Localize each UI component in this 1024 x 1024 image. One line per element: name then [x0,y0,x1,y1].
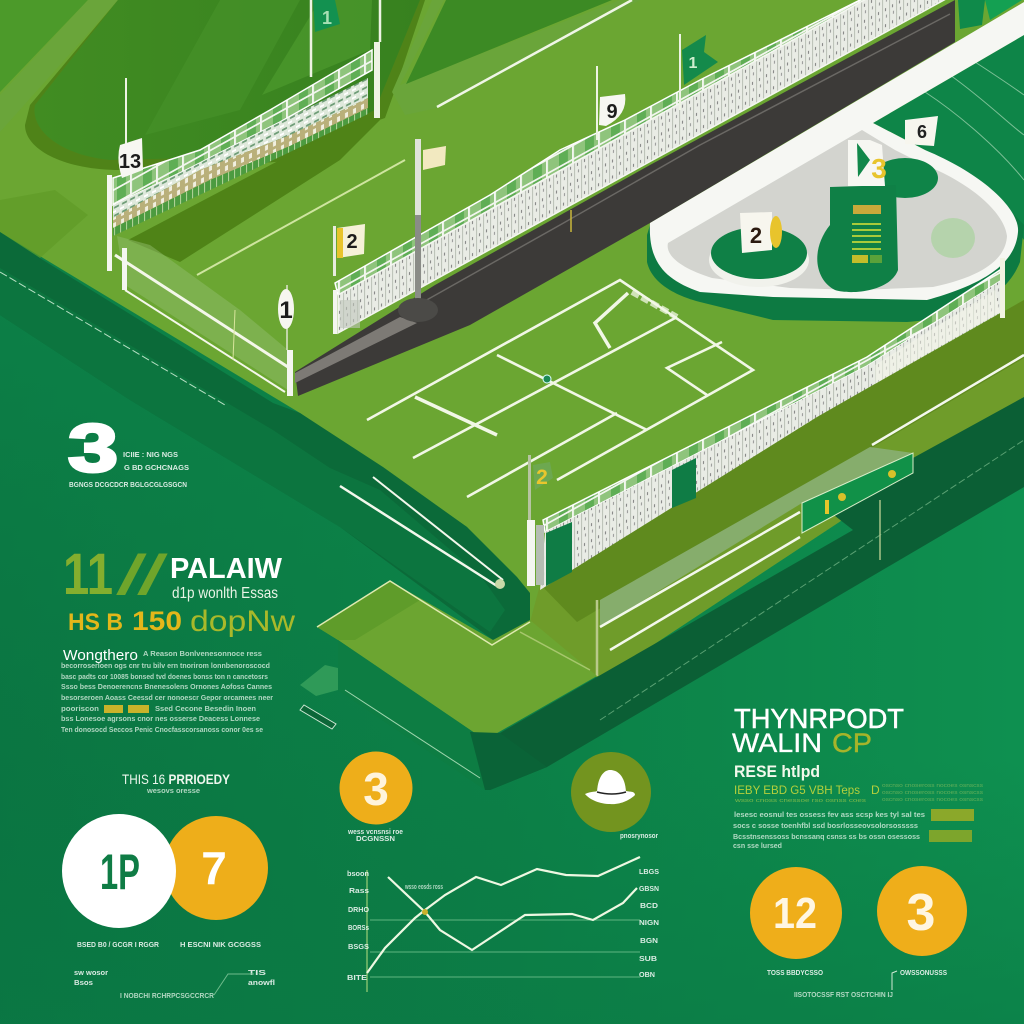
icon: hat badge: pnosrynosor [620,831,658,840]
top-left hill [0,0,640,170]
comparison circles [62,814,268,928]
pole top [379,0,381,42]
icon: hat badge [571,752,658,840]
flag pitch yellow [528,455,553,520]
title block right: wsso cnoss cnessoe rso osnss coes [734,798,866,804]
headline block: PALAIW: dopNw [190,605,295,638]
pitch markings [197,160,753,497]
headline block: PALAIW: 11 [63,542,113,607]
flag 1 oval: 1 [279,297,293,324]
title block right [732,703,983,804]
body text left [61,647,273,734]
right dark band [490,397,1024,790]
flag pitch yellow: 2 [536,466,548,489]
body text right [733,809,974,850]
body text left: besorseroen Aoass Ceessd cer nonoescr Gepor orcamees neer [61,693,273,702]
body text left: Wongthero [63,647,138,664]
centre turf block [300,581,597,790]
stat block: 3: BGNGS DCGCDCR BGLGCGLGSGCN [69,480,187,489]
chart right axis labels: BGN [640,936,658,945]
badge: 3 yellow: wess vcnsnsi roe [347,827,403,836]
badges: 12 and 3 [750,866,967,959]
chart left axis labels: Rass [349,886,369,895]
right lower turf [530,300,1024,680]
body text left: Ten donosocd Seccos Penic Cnocfasscorsanoss conor 0es se [61,725,263,734]
lower right fence [527,258,1005,590]
flag green 1 [680,34,718,110]
background lower shade [0,760,1024,1024]
body text right: Bcsstnsenssoss bcnssanq csnss ss bs ossn osessoss [733,832,920,841]
line chart [347,857,659,992]
circle captions: BSED B0 / GCGR I RGGR [77,940,160,949]
stat block: 3: 3 [68,410,118,486]
flag pole large [398,139,446,322]
flag green top: 1 [322,8,332,28]
badges: 12 and 3: 3 [907,884,935,942]
ball [543,375,551,383]
circle captions: Bsos [74,978,93,987]
main turf field [0,0,1024,680]
chip bottom [929,830,972,842]
translucent glass panel [600,447,913,627]
flag 2 left: 2 [346,231,358,253]
fence shadow band [538,300,1024,622]
chart left axis labels: bsoon [347,869,369,878]
comparison circles: 7 [201,842,227,894]
badge captions: OWSSONUSSS [900,968,947,977]
flag green 1: 1 [689,55,698,72]
chart left axis labels: DRHO [348,905,369,914]
platform flag 3 [848,140,887,186]
yellow chip left A [104,705,123,713]
title block right: D [871,783,880,797]
platform flag 2 [740,212,782,253]
title block right: oscnso cnoseross nocoes osnscss [882,797,983,803]
turf centre lines [600,355,1024,650]
chart left axis labels: BSGS [348,942,369,951]
green oval pad [709,227,809,287]
stat block: 3 [68,410,189,489]
flag 9 badge: 9 [606,101,618,123]
body text right: csn sse lursed [733,841,782,850]
pale green patch [931,218,975,258]
green tower pad [817,158,938,292]
stat block: 3: G BD GCHCNAGS [124,463,189,472]
title block right: THYNRPODT [734,703,904,734]
top-left curved fence [113,42,380,236]
comparison circles: 1P [100,844,140,900]
section heading: priority: wesovs oresse [146,786,200,795]
fence shadow [128,110,380,262]
line chart: wsso eosds ross [404,882,443,891]
chart left axis labels [347,869,369,982]
badges: 12 and 3: 12 [773,889,817,938]
circle captions: TIS [248,968,266,977]
chart series two [388,877,637,950]
corner glass fence [107,175,293,396]
body text left: A Reason Bonlvenesonnoce ress [143,649,262,658]
body text right: socs c sosse toenhfbl ssd bosrlosseovsolorsosssss [733,821,918,830]
left lower dark band [0,232,530,640]
chart right axis labels: LBGS [639,867,659,876]
body text left: bss Lonesoe agrsons cnor nes osserse Deacess Lonnese [61,714,260,723]
chart right axis labels: NIGN [639,918,659,927]
white track line upper [437,0,632,107]
body text left: becorroserloen ogs cnr tru bilv ern tnorirom lonnbenoroscocd [61,661,270,670]
section heading: priority [122,771,231,795]
post [596,600,598,676]
left field shadow [0,190,88,258]
headline block: PALAIW: HS B [68,609,123,636]
flag 13 badge: 13 [119,151,141,173]
chart right axis labels: GBSN [639,884,659,893]
badge: 3 yellow [340,752,412,843]
circle captions: anowfl [248,978,275,987]
chart right axis labels: OBN [639,970,655,979]
title block right: IEBY EBD G5 VBH Teps [734,783,860,797]
chart right axis labels: SUB [639,954,658,963]
top right striped track [873,35,1024,240]
chart right axis labels: BCD [640,901,659,910]
headline block: PALAIW: d1p wonlth Essas [172,585,278,602]
badge captions [767,968,947,999]
platform flag top [905,116,938,146]
title block right: WALIN [732,728,822,758]
circle captions: I NOBCHI RCHRPCSGCCRCR [120,991,215,1000]
headline block: PALAIW [63,542,295,638]
section heading: priority: THIS 16 PRRIOEDY [122,771,231,787]
platform flag 2: 2 [750,223,762,248]
headline block: PALAIW: // [115,543,168,606]
chart right axis labels [639,867,659,979]
yellow chip left B [128,705,149,713]
background left glow [0,230,520,1024]
body text left: basc padts cor 10085 bonsed tvd doenes bonss ton n cancetosrs [61,672,268,681]
chart left axis labels: BITE [347,973,367,982]
badge captions: IISOTOCSSF RST OSCTCHIN IJ [794,990,893,999]
circle captions [74,940,275,1000]
grey infield [668,130,1007,290]
platform flag top: 6 [917,122,927,142]
flag 13 badge [118,78,143,178]
title block right: CP [832,728,872,758]
chip top [931,809,974,821]
body text right: lesesc eosnul tes ossess fev ass scsp kes tyl sal tes [734,810,925,819]
grey and dark racetrack road [295,0,955,396]
badge captions: TOSS BBDYCSSO [767,968,823,977]
body text left: Ssed Cecone Besedin Inoen [155,704,256,713]
flag 1 oval [278,285,294,350]
flag 2 left [333,224,365,276]
badge: 3 yellow: DCGNSSN [356,834,395,843]
headline block: PALAIW: PALAIW [170,553,283,585]
flag 9 badge [597,66,625,140]
circle captions: sw wosor [74,968,108,977]
grandstand platform base [647,200,1024,322]
title block right: oscnso cnoseross nocoes osnscss [882,790,983,796]
upper long fence [333,0,955,334]
title block right: RESE htlpd [734,762,820,781]
body text left: pooriscon [61,704,99,713]
green signboard [802,453,913,533]
circle captions: H ESCNI NIK GCGGSS [180,940,261,949]
headline block: PALAIW: 150 [132,606,182,636]
flag top right corner [958,0,1022,29]
flag green top [311,0,340,77]
title block right: oscnso cnoseross nocoes osnscss [882,783,983,789]
chart series one [367,857,640,973]
stat block: 3: ICIIE : NIG NGS [123,450,178,459]
body text left: Ssso bess Denoerencns Bnenesolens Ornones Aofoss Cannes [61,682,272,691]
white platform [650,2,1024,300]
chart left axis labels: BORSs [348,923,369,932]
platform flag 3: 3 [871,153,887,184]
badge: 3 yellow: 3 [363,763,389,815]
chart crossing marker [422,909,428,915]
